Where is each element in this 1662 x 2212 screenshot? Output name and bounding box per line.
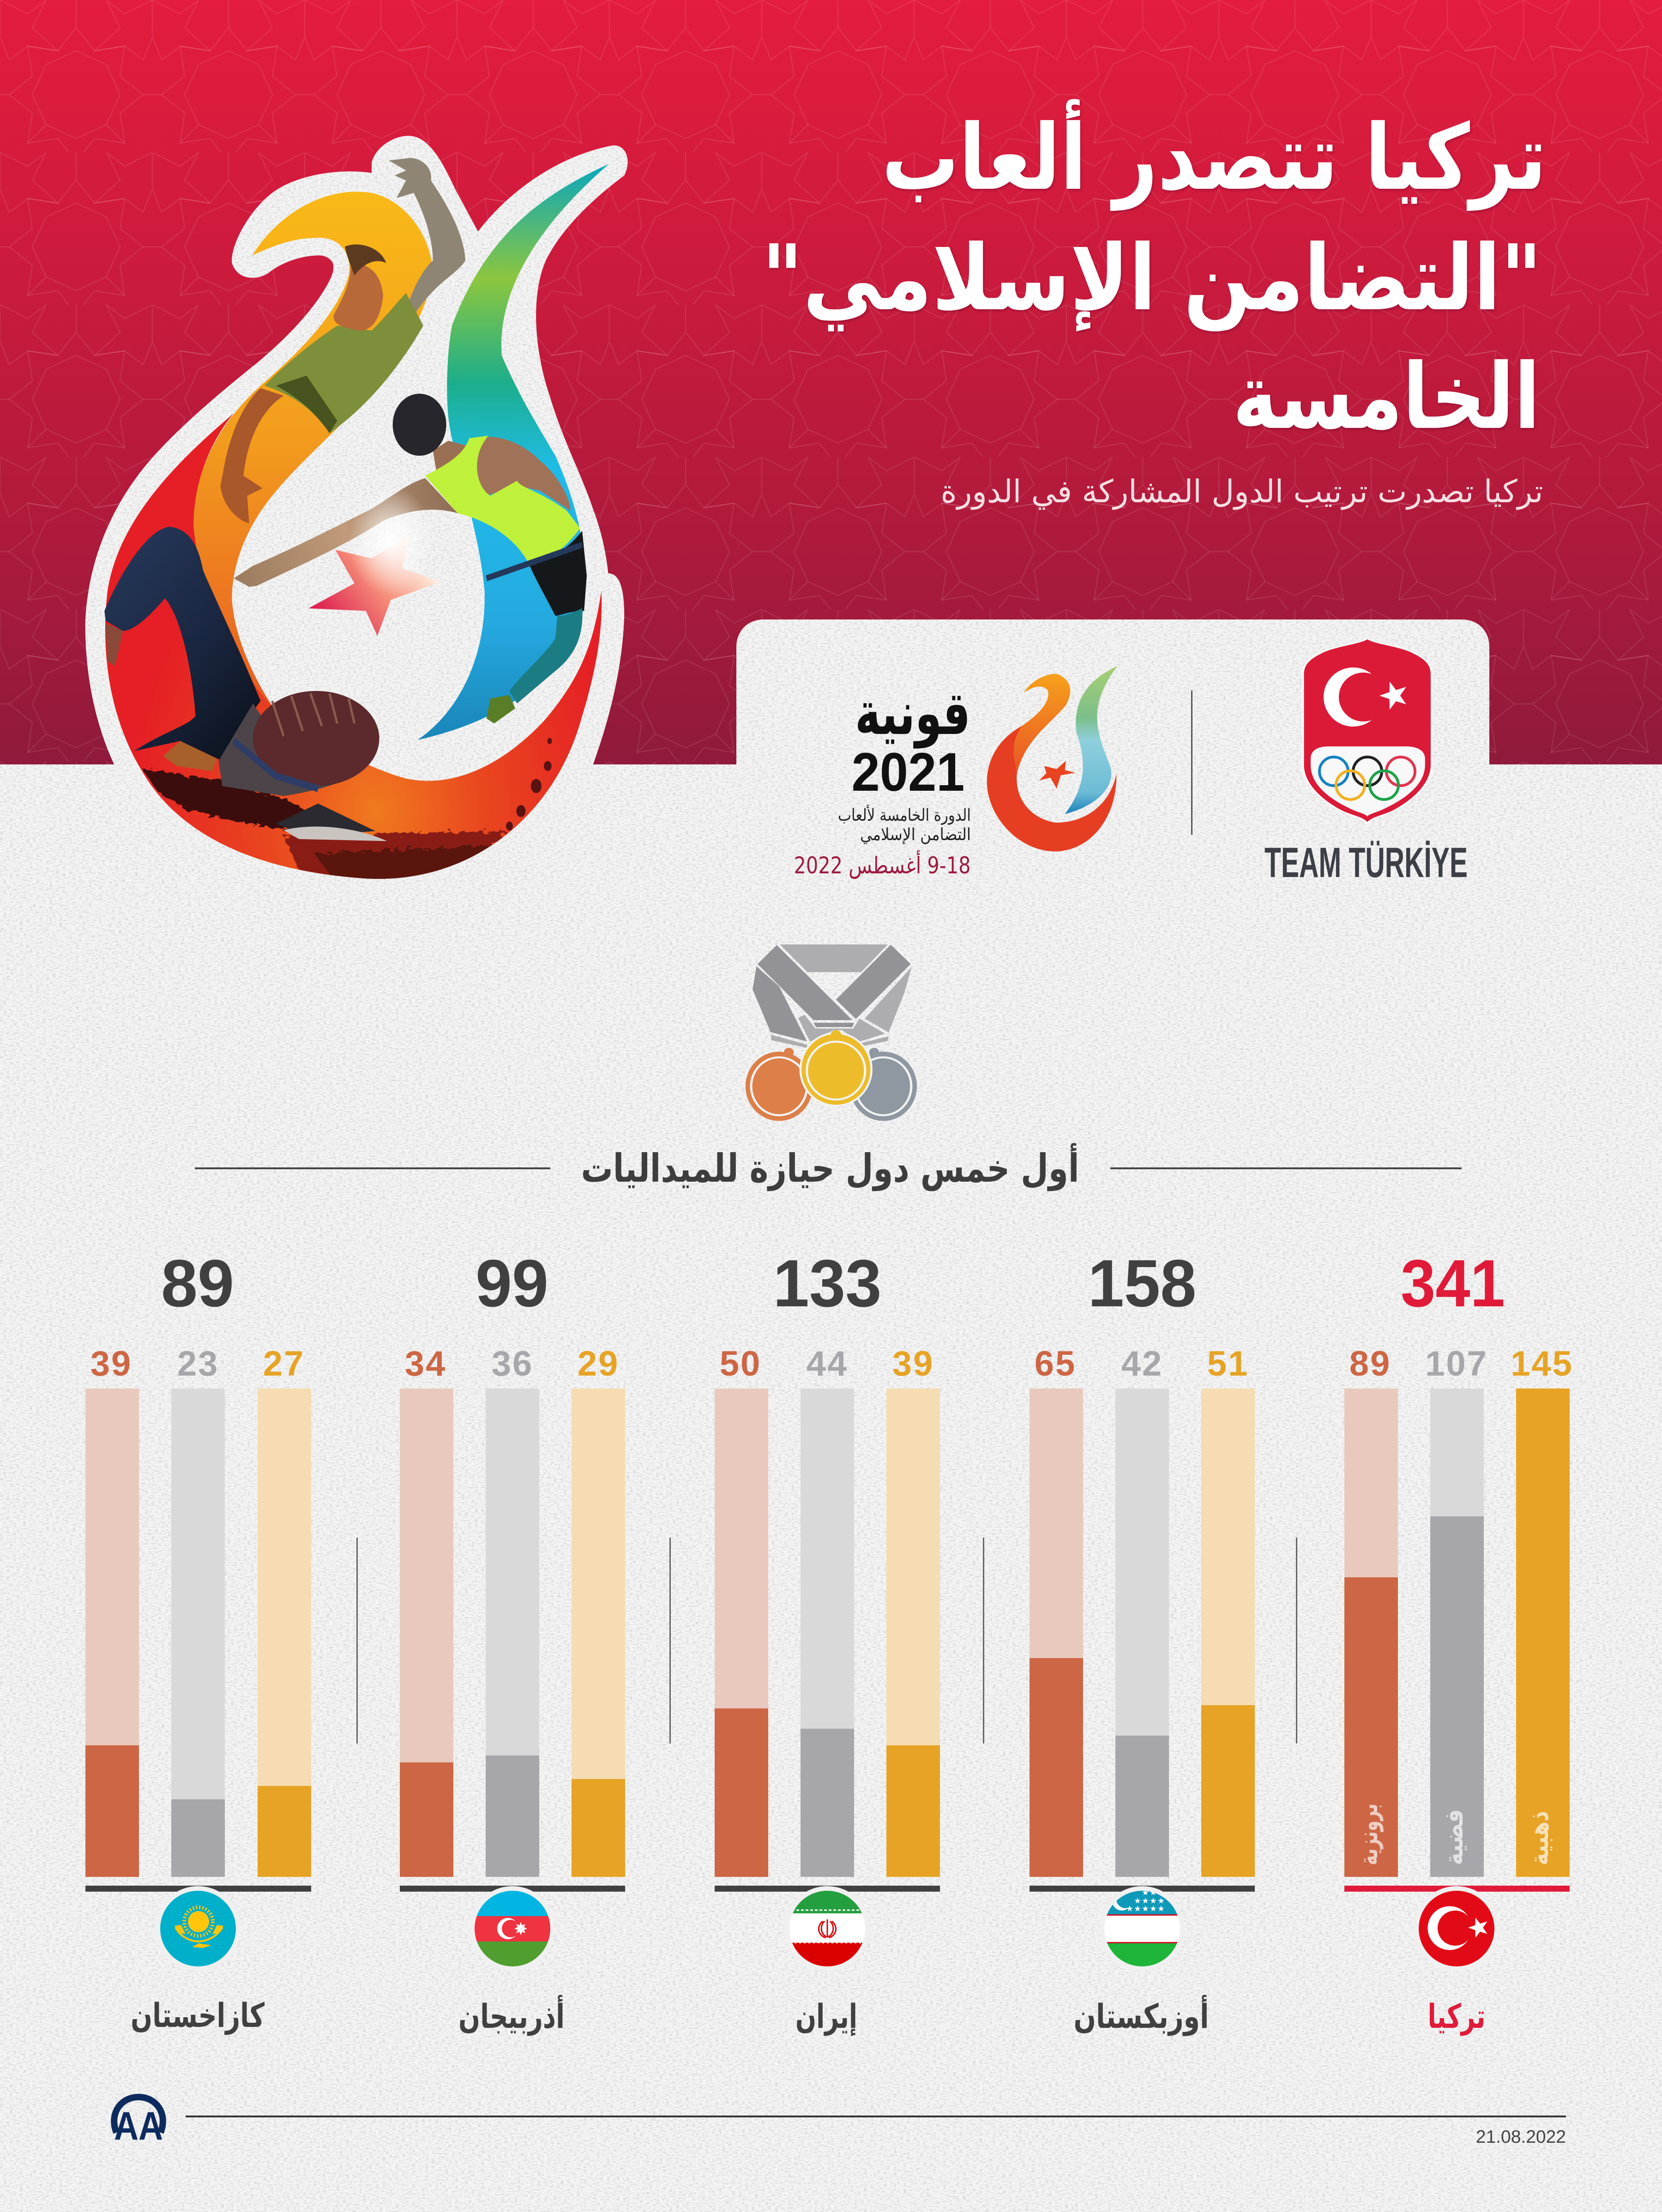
logo text: year: 2021: [851, 742, 965, 803]
total Kazakhstan: 89: [161, 1246, 234, 1321]
values Kazakhstan: [90, 1344, 305, 1383]
shield crescent: [1324, 667, 1388, 727]
values Iran: 50: [720, 1344, 761, 1383]
flag: Azerbaijan: [470, 1886, 555, 1972]
values Turkey: 89: [1349, 1344, 1391, 1383]
athlete: high jumper: [234, 394, 587, 723]
athlete: runner: [220, 158, 465, 523]
emblem white silhouette: [85, 136, 628, 892]
bar labels: [1354, 1803, 1554, 1865]
logo text: description: التضامن الإسلامي: [860, 825, 971, 844]
values Azerbaijan: 36: [492, 1344, 533, 1383]
logo text: dates: 9-18 أغسطس 2022: [794, 850, 970, 879]
olympic rings: [1319, 757, 1415, 799]
center star: [308, 535, 441, 636]
logo orange ribbon: [1014, 674, 1070, 773]
shield lower panel: [1311, 746, 1425, 817]
values Iran: 44: [807, 1344, 848, 1383]
bars Turkey: [1344, 1389, 1570, 1877]
flag: Turkey: [1414, 1886, 1499, 1971]
name: Kazakhstan: كازاخستان: [131, 1996, 265, 2035]
hero flame emblem with athletes: [85, 136, 628, 892]
flag: Iran: [785, 1886, 870, 1971]
logo text: Konya: قونية: [855, 678, 970, 749]
header background: [0, 0, 1662, 766]
values Turkey: 145: [1511, 1344, 1573, 1383]
total Iran: 133: [773, 1246, 882, 1321]
title: [762, 99, 1547, 450]
title: الخامسة: [1233, 344, 1540, 450]
athlete: swimmer: [104, 527, 552, 886]
values Uzbekistan: 65: [1035, 1344, 1076, 1383]
paper background and logo panel: [0, 619, 1662, 2212]
logo text: description: الدورة الخامسة لألعاب: [838, 805, 971, 825]
values Uzbekistan: [1035, 1344, 1249, 1383]
values Azerbaijan: [405, 1344, 619, 1383]
shield body: [1304, 639, 1431, 822]
values Kazakhstan: 23: [177, 1344, 219, 1383]
flag: Kazakhstan: [156, 1886, 241, 1971]
bars Azerbaijan: [400, 1389, 625, 1877]
team Turkiye shield: [1304, 639, 1431, 822]
shield red: [1304, 639, 1431, 822]
bars Iran: [715, 1389, 940, 1877]
footer AA logo: AA: [114, 2104, 163, 2148]
name: Uzbekistan: أوزبكستان: [1074, 1995, 1209, 2036]
logo blue ribbon: [1065, 666, 1117, 814]
logo red crescent: [987, 726, 1116, 852]
baseline Iran: [715, 1886, 940, 1892]
bar labels: فضية: [1439, 1809, 1469, 1865]
icon: medals: [746, 944, 917, 1121]
total Azerbaijan: 99: [476, 1246, 548, 1321]
shield star: [1379, 682, 1406, 709]
logo star: [1039, 761, 1075, 788]
chart: Uzbekistan: [1030, 1246, 1255, 2036]
footer date: 21.08.2022: [1476, 2127, 1566, 2147]
values Turkey: 107: [1425, 1344, 1488, 1383]
section heading: [195, 1143, 1462, 1191]
baseline Kazakhstan: [85, 1886, 311, 1892]
values Azerbaijan: 34: [405, 1344, 446, 1383]
footer line: [186, 2116, 1566, 2117]
values Kazakhstan: 27: [263, 1344, 305, 1383]
bars Kazakhstan: [85, 1389, 311, 1877]
chart: Iran: [715, 1246, 940, 2036]
section heading: أول خمس دول حيازة للميداليات: [581, 1143, 1079, 1191]
chart: Kazakhstan: [85, 1246, 311, 2035]
total Uzbekistan: 158: [1088, 1246, 1197, 1321]
name: Azerbaijan: أذربيجان: [458, 1995, 565, 2036]
flag: Uzbekistan: [1100, 1886, 1185, 1971]
red crescent: [105, 413, 602, 879]
team Turkiye wordmark: TEAM TÜRKİYE: [1265, 839, 1468, 886]
logo text: description: [838, 805, 971, 844]
values Kazakhstan: 39: [90, 1344, 132, 1383]
values Uzbekistan: 51: [1207, 1344, 1249, 1383]
values Iran: [720, 1344, 934, 1383]
chart: Azerbaijan: [400, 1246, 625, 2036]
name: Turkey: تركيا: [1427, 1997, 1486, 2036]
values Azerbaijan: 29: [578, 1344, 619, 1383]
subtitle: تركيا تصدرت ترتيب الدول المشاركة في الدورة: [941, 474, 1543, 510]
baseline Uzbekistan: [1030, 1886, 1255, 1892]
values Uzbekistan: 42: [1121, 1344, 1163, 1383]
name: Iran: إيران: [795, 1997, 857, 2036]
chart: Turkey: [1344, 1246, 1573, 2036]
panel divider: [1191, 691, 1192, 835]
bars Uzbekistan: [1030, 1389, 1255, 1877]
values Iran: 39: [892, 1344, 934, 1383]
total Turkey: 341: [1401, 1246, 1505, 1321]
star glow: [349, 486, 433, 596]
bar labels: برونزية: [1354, 1803, 1384, 1865]
title: تركيا تتصدر ألعاب: [882, 99, 1547, 211]
values Turkey: [1349, 1344, 1573, 1383]
baseline Turkey: [1344, 1886, 1570, 1892]
bar labels: ذهبية: [1524, 1811, 1554, 1865]
group separators: [356, 1538, 1297, 1743]
game logo: Konya 2021: [987, 666, 1117, 852]
orange ribbon: [193, 192, 432, 706]
blue green ribbon: [417, 164, 609, 740]
baseline Azerbaijan: [400, 1886, 625, 1892]
title: "التضامن الإسلامي": [762, 226, 1542, 331]
